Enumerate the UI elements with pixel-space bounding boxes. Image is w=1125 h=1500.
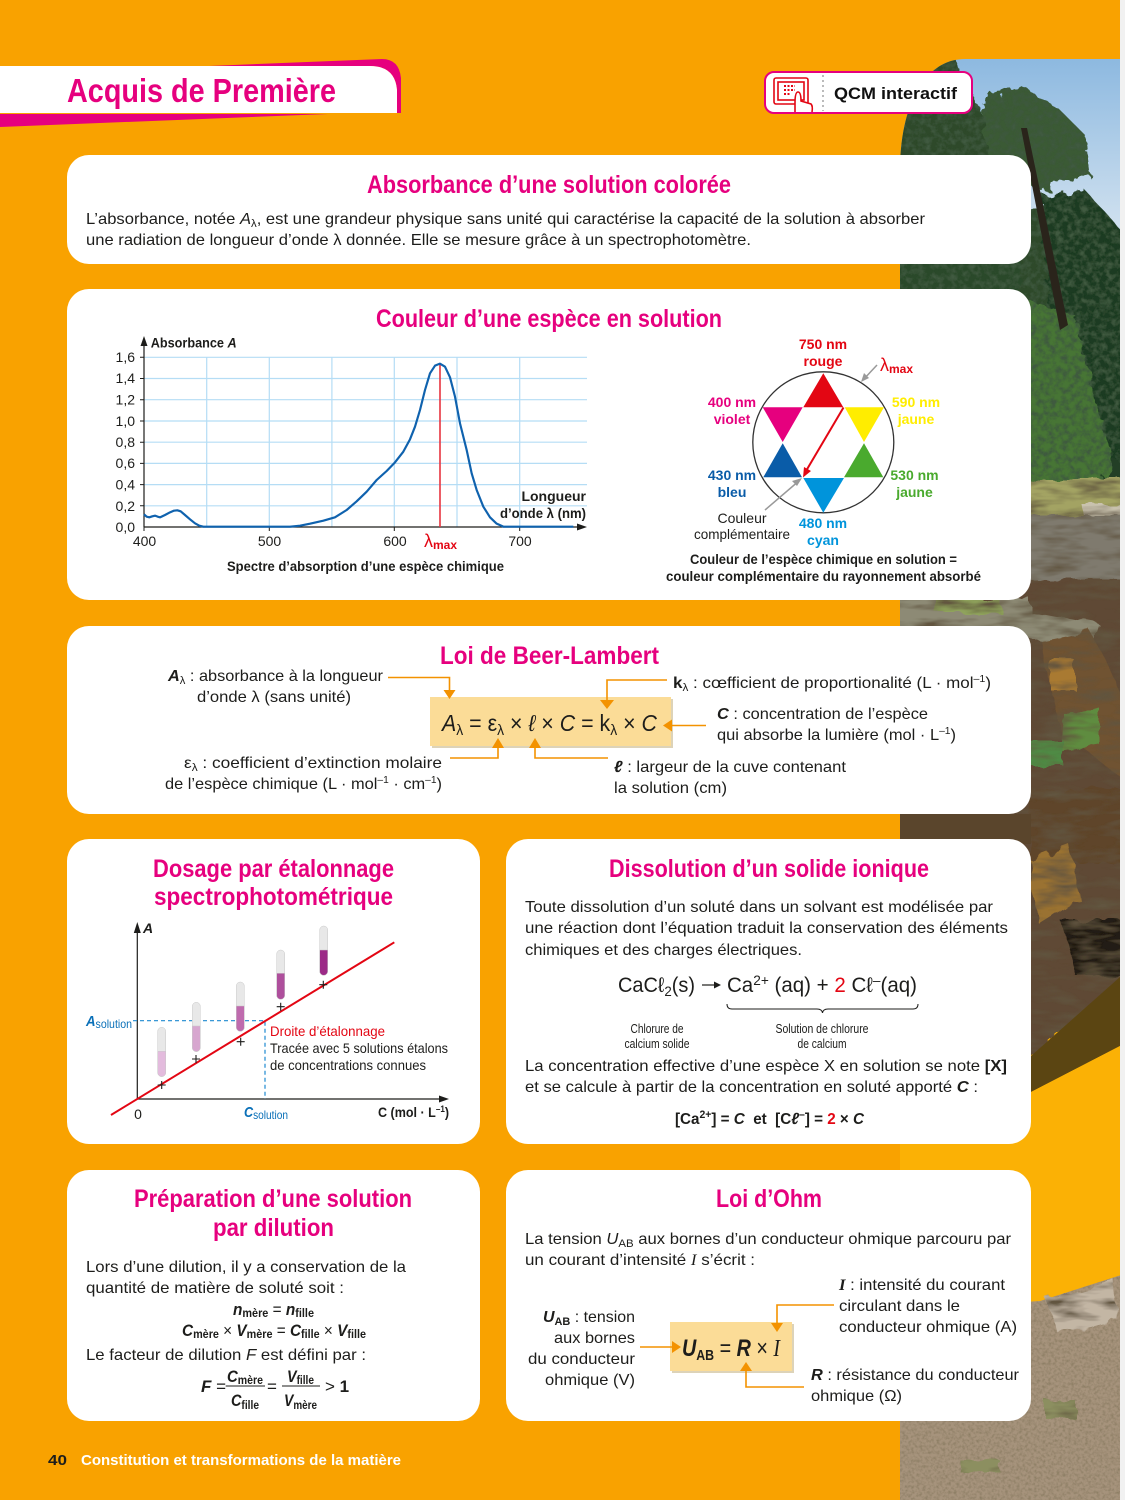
formula box: λ [497,722,505,739]
axis title: wavelength: d’onde λ (nm) [500,505,586,521]
heading [134,1185,412,1242]
equation [618,972,918,1013]
wheel labels [694,336,940,548]
formula box: × [504,710,528,736]
axis labels [85,920,449,1122]
y tick labels: 1,2 [116,392,135,408]
test tubes [158,926,328,1077]
annotation: U: AB [555,1316,570,1328]
button: QCM interactif [765,72,972,113]
panel: Beer-Lambert [67,626,1031,814]
footer: Constitution et transformations de la matière [81,1452,401,1469]
heading: Dosage par étalonnage [153,855,394,883]
heading: spectrophotométrique [154,883,393,911]
formula: conservation: fille [295,1306,314,1320]
formula box: R × I [737,1335,781,1362]
heading: Loi de Beer-Lambert [440,642,660,670]
formula box: = [714,1335,737,1362]
formula box: ℓ × C = k [528,710,613,736]
wheel labels: jaune [897,411,934,427]
equation: 2+ [753,972,769,988]
formula: dilution factor: fille [297,1373,314,1387]
wheel caption [666,551,981,584]
heading: Loi d’Ohm [716,1185,822,1213]
x tick labels: 700 [508,533,532,549]
annotation: U: du conducteur [528,1351,636,1368]
annotation: epsilon [165,755,442,793]
formula: conservation: V [236,1321,248,1340]
annotation: l: la solution (cm) [614,780,727,797]
annotation: U: ohmique (V) [545,1372,635,1389]
formula: conservation: n [233,1300,242,1319]
formula: conservation: mère [242,1306,269,1320]
panel: dosage [67,839,480,1144]
formula: conservation: mère [247,1327,273,1341]
equation labels [624,1021,868,1051]
heading: Absorbance d’une solution colorée [367,171,731,199]
text block: chimiques et des charges électriques. [525,942,802,959]
wheel labels: max [889,362,913,376]
annotation: k: –1 [974,674,986,685]
annotation: A: λ [180,675,186,687]
annotation: epsilon: –1 [377,775,389,786]
text block: dilution factor: Le facteur de dilution F est défini par : [86,1347,366,1364]
colour wheel [666,336,981,584]
wheel labels: cyan [807,532,839,548]
formula: concentrations: 2 × C [827,1111,865,1128]
annotation: epsilon: de l’espèce chimique (L · mol [165,776,372,793]
banner: Acquis de Première [0,59,401,127]
annotation: A [167,668,384,706]
y tick labels [116,349,135,535]
wheel caption: couleur complémentaire du rayonnement absorbé [666,568,981,584]
text block: une réaction dont l’équation traduit la conservation des éléments [525,920,1008,937]
formula: conservation: × [219,1321,236,1340]
formula: conservation: C [290,1321,302,1340]
arrow: complementary pointer [765,478,802,510]
lambda max label: λ [424,531,433,551]
annotation: I: I : intensité du courant [838,1277,1006,1294]
annotation: A: d’onde λ (sans unité) [197,689,351,706]
formula: dilution factor: fille [241,1398,259,1412]
axis labels: A [142,920,153,936]
annotation: l [614,759,847,797]
axis labels: C [244,1104,254,1121]
y tick labels: 1,0 [116,413,135,429]
text block: Toute dissolution d’un soluté dans un solvant est modélisée par [525,899,994,916]
annotation: C: C : concentration de l’espèce [717,706,928,723]
axis labels: A [85,1013,96,1030]
heading: Préparation d’une solution [134,1185,412,1213]
annotation: C: qui absorbe la lumière (mol · L [717,727,933,744]
text block: quantité de matière de soluté soit : [86,1280,344,1297]
equation labels: Solution de chlorure [776,1021,868,1036]
formula box: U [682,1335,697,1362]
chart annotation: Droite d’étalonnage [270,1023,385,1039]
button label: QCM interactif [834,84,957,103]
annotation: I: conducteur ohmique (A) [839,1319,1017,1336]
annotation: A: : absorbance à la longueur [185,668,384,685]
formula box: A [440,710,456,736]
annotation: epsilon: ε [184,755,191,772]
annotation: epsilon: λ [192,762,198,774]
formula: dilution factor: = [267,1377,277,1396]
formula: conservation: = [268,1300,286,1319]
y tick labels: 0,8 [116,434,135,450]
formula: conservation: C [182,1321,194,1340]
equation: (aq) [881,974,917,997]
text block: AB [618,1238,634,1250]
axis labels: ) [445,1104,449,1120]
formula box: × [617,710,642,736]
formula: dilution factor [201,1367,349,1412]
y tick labels: 1,6 [116,349,135,365]
wheel labels: 480 nm [799,515,847,531]
panel: absorbance [67,155,1031,264]
x tick labels: 500 [258,533,281,549]
wheel labels: complémentaire [694,526,790,542]
wheel labels: rouge [804,353,843,369]
formula: conservation: × [320,1321,337,1340]
annotation: epsilon: · cm [389,776,425,793]
wheel labels: λ [880,355,889,375]
axis title: wavelength: Longueur [521,488,587,504]
text block: concentration: La concentration effective d’une espèce X en solution se note [X] [525,1058,1007,1075]
wheel labels: jaune [895,484,933,500]
axis labels: solution [96,1017,132,1031]
text block: La tension U [525,1231,618,1248]
annotation: C: –1 [939,726,951,737]
y tick labels: 0,2 [116,498,135,514]
equation labels: Chlorure de [630,1021,684,1036]
panel: Ohm [506,1170,1031,1421]
formula: dilution factor: F = [201,1377,226,1396]
formula box [430,697,673,748]
y tick labels: 0,4 [116,476,135,492]
wheel labels: 430 nm [708,467,756,483]
wheel caption: Couleur de l’espèce chimique en solution = [690,551,957,567]
wheel labels: violet [714,411,751,427]
text block: un courant d’intensité I s’écrit : [525,1252,755,1269]
annotation: k: ) [985,675,991,692]
equation: 2 Cℓ [834,974,874,997]
formula: concentrations: – [799,1109,805,1121]
text block: L’absorbance, notée A [86,211,251,228]
arrow: C [663,720,706,732]
axis labels: –1 [436,1104,445,1114]
wheel labels: 750 nm [799,336,847,352]
panel: dissolution [506,839,1031,1144]
equation: CaCℓ [618,974,667,997]
arrow: I [771,1305,834,1332]
data points [158,981,327,1089]
text block: , est une grandeur physique sans unité qui caractérise la capacité de la solution à absorber [257,211,926,228]
equation: (s) [672,974,695,997]
heading: Couleur d’une espèce en solution [376,305,722,333]
annotation: R [811,1367,1020,1405]
formula: dilution factor: V [284,1391,295,1410]
arrow: epsilon [450,738,504,758]
arrow: R [740,1362,804,1387]
footer: 40 [48,1452,67,1469]
panel: dilution [67,1170,480,1421]
heading [153,855,394,911]
annotation: l: ℓ : largeur de la cuve contenant [614,759,847,776]
arrow: l [529,738,608,758]
formula: dilution factor: mère [293,1398,317,1412]
annotation: k: λ [682,682,689,694]
lambda max label: max [433,538,457,552]
annotation: I [838,1277,1017,1336]
x tick labels: 400 [133,533,156,549]
formula: concentrations: C et [Cℓ [734,1111,799,1128]
wheel labels: 590 nm [892,394,940,410]
photo: pine trees, rocks and yellow river [900,59,1120,1500]
formula box: AB [696,1347,714,1364]
text block: Lors d’une dilution, il y a conservation de la [86,1259,406,1276]
formula: concentrations: ] = [805,1111,827,1128]
formula: dilution factor: C [227,1367,238,1386]
annotation: R: ohmique (Ω) [811,1388,902,1405]
formula: conservation: = [272,1321,290,1340]
formula: concentrations: [Ca [675,1111,701,1128]
text block line 2: une radiation de longueur d’onde λ donnée. Elle se mesure grâce à un spectrophotomètre. [86,232,751,249]
text block: λ [251,218,257,230]
formula box: C [642,710,657,736]
panel: couleur [67,289,1031,600]
annotation: C: ) [951,727,956,744]
y tick labels: 0,0 [116,519,135,535]
annotation: A: A [167,668,180,685]
chart: calibration line [85,920,449,1122]
arrow: lambda max pointer [861,365,877,382]
heading: Dissolution d’un solide ionique [609,855,929,883]
chart caption: Spectre d’absorption d’une espèce chimique [227,558,504,574]
formula box: λ [610,722,618,739]
annotation: I: circulant dans le [839,1298,960,1315]
arrow: complementary colour [803,408,844,478]
formula: dilution factor: > 1 [325,1377,349,1396]
formula: conservation: mère [193,1327,219,1341]
axis labels: solution [253,1108,288,1122]
heading: par dilution [213,1214,334,1242]
formula: dilution factor: C [231,1391,242,1410]
text block: concentration [525,1058,1007,1096]
arrow: A [388,678,456,699]
x tick labels [133,533,532,549]
axis labels: 0 [134,1106,142,1122]
annotation: epsilon: –1 [425,775,437,786]
formula: concentrations: 2+ [699,1109,711,1121]
chart: absorption spectrum [116,334,587,574]
annotation: U: : tension [570,1309,635,1326]
equation labels: calcium solide [624,1036,690,1051]
y tick labels: 1,4 [116,370,135,386]
chart annotation: Tracée avec 5 solutions étalons [270,1040,448,1056]
annotation: epsilon: ) [437,776,442,793]
equation labels: de calcium [798,1036,846,1051]
equation: Ca [727,974,754,997]
formula box [670,1322,794,1373]
formula: dilution factor: V [287,1367,298,1386]
formula: conservation: V [337,1321,349,1340]
annotation: epsilon: : coefficient d’extinction molaire [198,755,442,772]
annotation: C [717,706,956,744]
equation: (aq) + [769,974,834,997]
formula box: λ [456,722,464,739]
annotation: U: U [543,1309,555,1326]
text block [525,899,1008,959]
formula: conservation [182,1300,366,1341]
chart annotation: de concentrations connues [270,1057,426,1073]
axis title: absorbance: Absorbance A [151,334,237,350]
axis labels: C (mol · L [378,1104,443,1120]
arrow: k [600,680,667,709]
wheel labels: 530 nm [890,467,939,483]
text block: concentration: et se calcule à partir de la concentration en soluté apporté C : [525,1079,978,1096]
x tick labels: 600 [383,533,407,549]
equation: 2 [664,983,672,999]
formula: conservation: fille [347,1327,366,1341]
text block [525,1231,1012,1269]
title: Acquis de Première [67,72,336,109]
formula: dilution factor: mère [238,1373,263,1387]
formula: conservation: n [286,1300,295,1319]
text block [86,1259,406,1297]
annotation: U [528,1309,636,1389]
annotation: R: R : résistance du conducteur [811,1367,1020,1384]
wheel labels: Couleur [717,510,767,526]
arrow: U [640,1341,681,1353]
formula box: = ε [463,710,497,736]
annotation: k: : cœfficient de proportionalité (L · mol [688,675,974,692]
wheel labels: bleu [718,484,746,500]
chart annotation [270,1023,448,1073]
wheel labels: 400 nm [708,394,756,410]
equation: – [873,972,881,988]
y tick labels: 0,6 [116,455,135,471]
annotation: U: aux bornes [554,1330,635,1347]
icon: touch screen [774,78,812,112]
formula: concentrations: ] = [711,1111,734,1128]
text block: aux bornes d’un conducteur ohmique parcouru par [634,1231,1012,1248]
annotation: k: k [673,675,683,692]
axis title: wavelength [500,488,587,521]
formula: conservation: fille [301,1327,320,1341]
